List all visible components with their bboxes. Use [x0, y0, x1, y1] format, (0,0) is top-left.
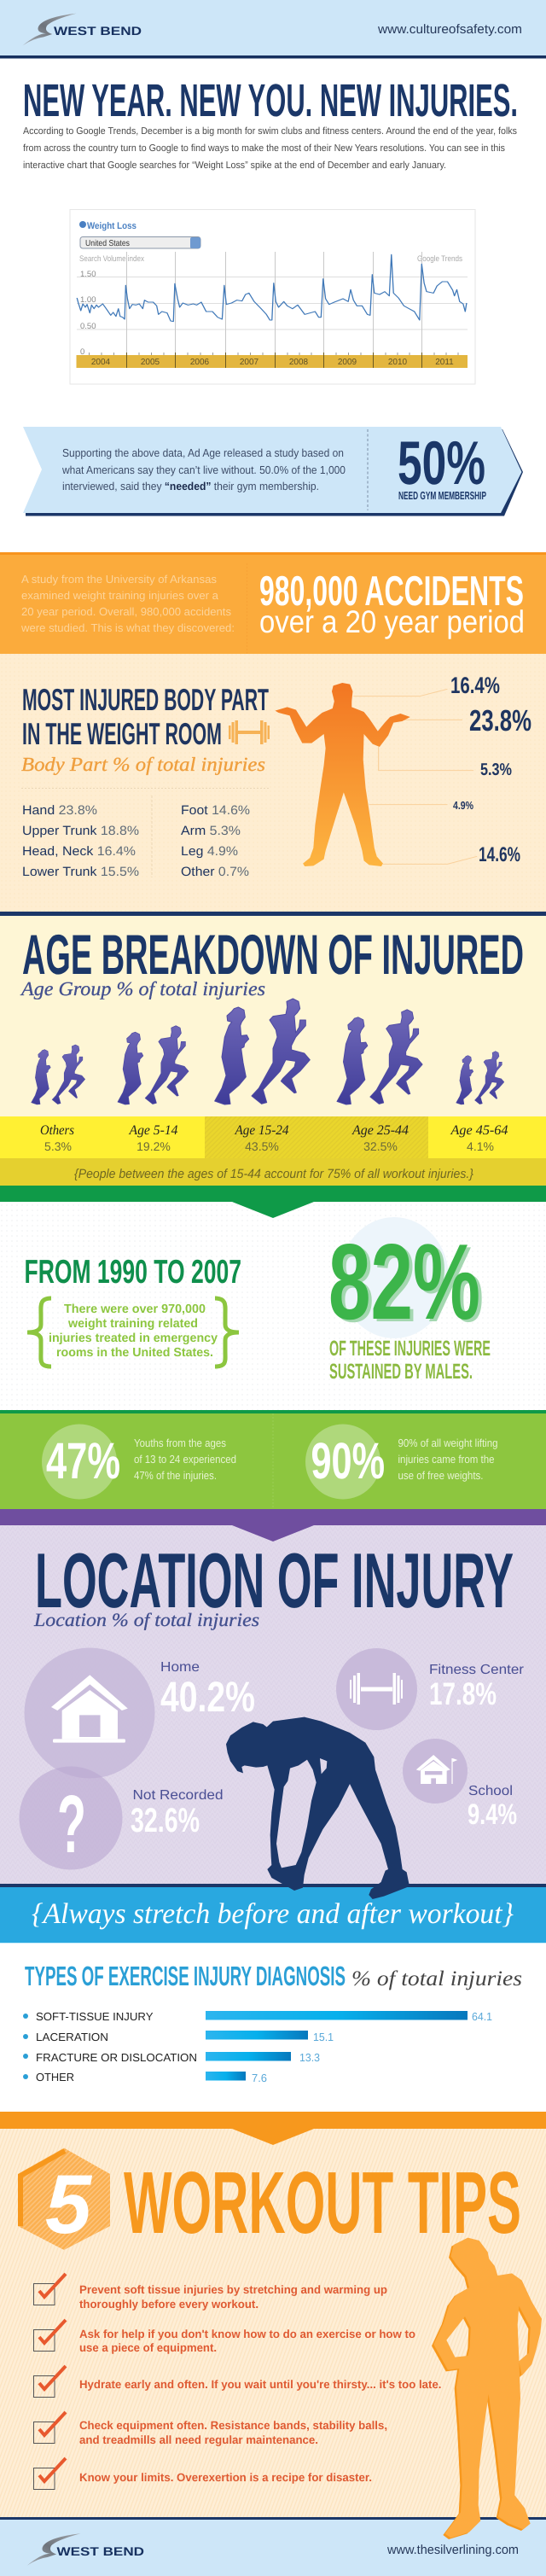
- panel: orange accidents band: [0, 552, 546, 654]
- row: soft-tissue injury: [23, 2010, 492, 2023]
- year axis band: 2005: [141, 358, 160, 367]
- icon: dumbbell: [229, 720, 270, 744]
- tip 2: [34, 2320, 415, 2354]
- age group table: Age 5-14: [129, 1123, 177, 1138]
- header band: [0, 0, 546, 58]
- chart axis labels: 0.50: [80, 322, 96, 331]
- body callout values: 14.6%: [479, 843, 520, 866]
- location values: [131, 1660, 525, 1839]
- figure: woman stretching: [226, 1717, 410, 1899]
- row: fracture or dislocation: [23, 2051, 320, 2064]
- chart axis labels: 0: [80, 347, 84, 357]
- stat: 90%: 90%: [311, 1432, 385, 1489]
- youths text: [134, 1437, 236, 1482]
- age group table: Age 25-44: [351, 1123, 409, 1138]
- heading: MOST INJURED BODY PART: [22, 682, 269, 717]
- icon: hexagon with 5: [18, 2148, 110, 2251]
- row: other: OTHER: [36, 2071, 74, 2084]
- study description: 20 year period. Overall, 980,000 accidents: [21, 605, 231, 618]
- row: soft-tissue injury: SOFT-TISSUE INJURY: [36, 2010, 154, 2023]
- callout text: what Americans say they can’t live without. 50.0% of the 1,000: [61, 463, 346, 476]
- chart axis labels: 1.50: [80, 270, 96, 279]
- year axis band: 2010: [388, 358, 408, 367]
- body callout values: 4.9%: [453, 799, 473, 812]
- search volume line: [77, 254, 467, 322]
- body part list: Leg 4.9%: [181, 844, 238, 859]
- tip 4: [34, 2412, 387, 2446]
- youths text: of 13 to 24 experienced: [134, 1453, 236, 1466]
- icon: unknown circle: [19, 1767, 123, 1870]
- year axis band: 2004: [91, 358, 111, 367]
- region dropdown: United States: [85, 239, 130, 248]
- free weights text: [398, 1437, 498, 1482]
- body part list: Lower Trunk 15.5%: [22, 865, 139, 879]
- tip 3: [34, 2366, 442, 2397]
- figure: standing woman silhouette: [432, 2238, 542, 2539]
- banner: always stretch: [0, 1884, 546, 1944]
- callout arrow: gym membership: [23, 427, 523, 516]
- header url: www.cultureofsafety.com: [377, 22, 522, 37]
- subheading: Body Part % of total injuries: [21, 754, 265, 775]
- location values: 32.6%: [131, 1802, 200, 1839]
- row: laceration: LACERATION: [36, 2031, 108, 2043]
- banner: always stretch: {Always stretch before and after workout}: [32, 1898, 514, 1930]
- panel: Google Trends line chart: [70, 210, 475, 384]
- study description: examined weight training injuries over a: [21, 589, 219, 602]
- age group table: [0, 1116, 546, 1186]
- location values: Home: [160, 1660, 200, 1675]
- tip 1: thoroughly before every workout.: [79, 2298, 258, 2311]
- body callout values: [450, 673, 531, 866]
- panel: green stat band: [0, 1410, 546, 1509]
- age group table: 32.5%: [363, 1139, 398, 1153]
- body part list: [22, 803, 250, 879]
- braces text: rooms in the United States.: [56, 1346, 213, 1360]
- logo: West Bend: WEST BEND: [54, 24, 142, 38]
- year axis band: 2007: [240, 358, 259, 367]
- tip 2: use a piece of equipment.: [79, 2341, 217, 2354]
- intro paragraph: interactive chart that Google searches for “Weight Loss” spike at the end of December and early January.: [23, 160, 446, 171]
- tip 1: Prevent soft tissue injuries by stretching and warming up: [79, 2283, 387, 2296]
- icon: home circle: [24, 1647, 155, 1779]
- stat caption: NEED GYM MEMBERSHIP: [398, 489, 486, 502]
- panel: most injured body part: [0, 654, 546, 912]
- stat circle: [340, 1217, 449, 1338]
- year axis band: [77, 353, 468, 368]
- stat: 90%: [305, 1424, 385, 1499]
- row: soft-tissue injury: 64.1: [472, 2010, 492, 2023]
- chart axis labels: Search Volume index: [79, 254, 144, 264]
- stat caption: [329, 1337, 491, 1384]
- age footnote: {People between the ages of 15-44 account for 75% of all workout injuries.}: [74, 1167, 473, 1181]
- chart legend: Weight Loss: [87, 221, 136, 231]
- age group table: Others: [40, 1123, 74, 1138]
- row: fracture or dislocation: 13.3: [299, 2051, 320, 2064]
- icon: unknown circle: ?: [57, 1779, 86, 1870]
- tip 4: Check equipment often. Resistance bands, stability balls,: [79, 2419, 387, 2432]
- body callout values: 5.3%: [480, 761, 512, 779]
- row: other: 7.6: [252, 2072, 267, 2084]
- location values: 9.4%: [468, 1798, 517, 1831]
- body part list: Arm 5.3%: [181, 824, 241, 838]
- body part list: Head, Neck 16.4%: [22, 844, 136, 859]
- heading: [22, 682, 269, 751]
- tip 5: Know your limits. Overexertion is a recipe for disaster.: [79, 2471, 372, 2484]
- body part list: Upper Trunk 18.8%: [22, 824, 139, 838]
- body part list: Hand 23.8%: [22, 803, 97, 818]
- study description: [20, 573, 235, 634]
- free weights text: 90% of all weight lifting: [398, 1437, 498, 1449]
- callout text: interviewed, said they “needed” their gym membership.: [62, 480, 319, 492]
- panel: 1990 to 2007: [0, 1186, 546, 1410]
- tip 1: [34, 2274, 387, 2311]
- row: other: [23, 2071, 267, 2084]
- braces text: weight training related: [67, 1317, 198, 1331]
- row: fracture or dislocation: FRACTURE OR DISLOCATION: [36, 2051, 197, 2064]
- year axis band: 2011: [435, 358, 454, 367]
- free weights text: injuries came from the: [398, 1453, 495, 1466]
- intro paragraph: According to Google Trends, December is a big month for swim clubs and fitness centers. Around the end of the year, folks: [23, 126, 517, 137]
- stat: 47%: [42, 1424, 120, 1499]
- footer url: www.thesilverlining.com: [386, 2543, 519, 2557]
- location values: Fitness Center: [429, 1663, 525, 1677]
- purple divider with arrow: [0, 1509, 546, 1542]
- braces text: [49, 1303, 218, 1360]
- heading: from 1990 to 2007: FROM 1990 TO 2007: [24, 1254, 241, 1291]
- tip 3: Hydrate early and often. If you wait until you're thirsty... it's too late.: [79, 2378, 442, 2391]
- footer band: [0, 2517, 546, 2576]
- icon: fitness circle: [336, 1648, 417, 1730]
- chart axis labels: 1.00: [80, 295, 96, 305]
- tip 2: Ask for help if you don't know how to do an exercise or how to: [79, 2328, 415, 2340]
- location values: 40.2%: [160, 1673, 255, 1721]
- stat: 47%: 47%: [46, 1432, 120, 1489]
- youths text: Youths from the ages: [134, 1437, 226, 1449]
- body part list: Other 0.7%: [181, 865, 249, 879]
- age group table: Age 15-24: [235, 1123, 288, 1138]
- year axis band: 2006: [190, 358, 210, 367]
- chart axis labels: Google Trends: [417, 254, 462, 264]
- row: laceration: 15.1: [313, 2031, 334, 2043]
- subheading: Location % of total injuries: [33, 1609, 259, 1630]
- study description: A study from the University of Arkansas: [21, 573, 217, 586]
- stat: 82%: 82%: [328, 1221, 480, 1342]
- study description: were studied. This is what they discovered:: [20, 621, 235, 634]
- icon: hexagon with 5: 5: [45, 2157, 92, 2251]
- location values: 17.8%: [429, 1676, 497, 1711]
- row: laceration: [23, 2031, 334, 2043]
- age group table: 43.5%: [245, 1139, 279, 1153]
- intro paragraph: [23, 126, 517, 171]
- footer logo: [27, 2533, 144, 2566]
- body callout values: 16.4%: [450, 673, 500, 698]
- callout text: [61, 446, 346, 492]
- age group table: 19.2%: [136, 1139, 171, 1153]
- panel: location of injury: [0, 1509, 546, 1885]
- free weights text: use of free weights.: [398, 1469, 483, 1482]
- orange divider with arrow: [0, 2112, 546, 2145]
- year axis band: 2009: [338, 358, 357, 367]
- chart axis labels: [79, 254, 462, 357]
- location values: School: [468, 1784, 513, 1798]
- chart heading: % of total injuries: [351, 1967, 522, 1990]
- braces text: There were over 970,000: [64, 1303, 206, 1316]
- green divider with arrow: [0, 1186, 546, 1218]
- region dropdown: [80, 237, 200, 248]
- panel: age breakdown: [0, 916, 546, 1186]
- footer logo: WEST BEND: [56, 2544, 144, 2558]
- location values: Not Recorded: [133, 1788, 224, 1803]
- stat: 82%: 82%: [332, 1224, 484, 1344]
- year axis band: 2008: [289, 358, 309, 367]
- stat: 50%: 50%: [398, 429, 485, 498]
- callout text: Supporting the above data, Ad Age released a study based on: [62, 446, 344, 459]
- tip 5: [34, 2458, 372, 2489]
- intro paragraph: from across the country turn to Google to find ways to make the most of their New Years resolutions. You can see in this: [23, 143, 505, 154]
- heading: IN THE WEIGHT ROOM: [22, 716, 222, 751]
- runners pictogram: [32, 999, 504, 1104]
- body part list: Foot 14.6%: [181, 803, 250, 818]
- age group table: Age 45-64: [450, 1123, 508, 1138]
- panel: diagnosis bar chart: [23, 1961, 522, 2084]
- age group table: 4.1%: [467, 1139, 494, 1153]
- braces text: injuries treated in emergency: [49, 1332, 218, 1345]
- braces: [27, 1298, 239, 1367]
- logo: West Bend: [23, 14, 142, 45]
- age group table: 5.3%: [44, 1139, 72, 1153]
- tip 4: and treadmills all need regular maintenance.: [79, 2433, 318, 2446]
- icon: school circle: [403, 1739, 468, 1804]
- youths text: 47% of the injuries.: [134, 1469, 217, 1482]
- panel: workout tips: [0, 2112, 546, 2518]
- subheading: Age Group % of total injuries: [20, 978, 265, 1000]
- figure: man silhouette with callouts: [275, 673, 531, 866]
